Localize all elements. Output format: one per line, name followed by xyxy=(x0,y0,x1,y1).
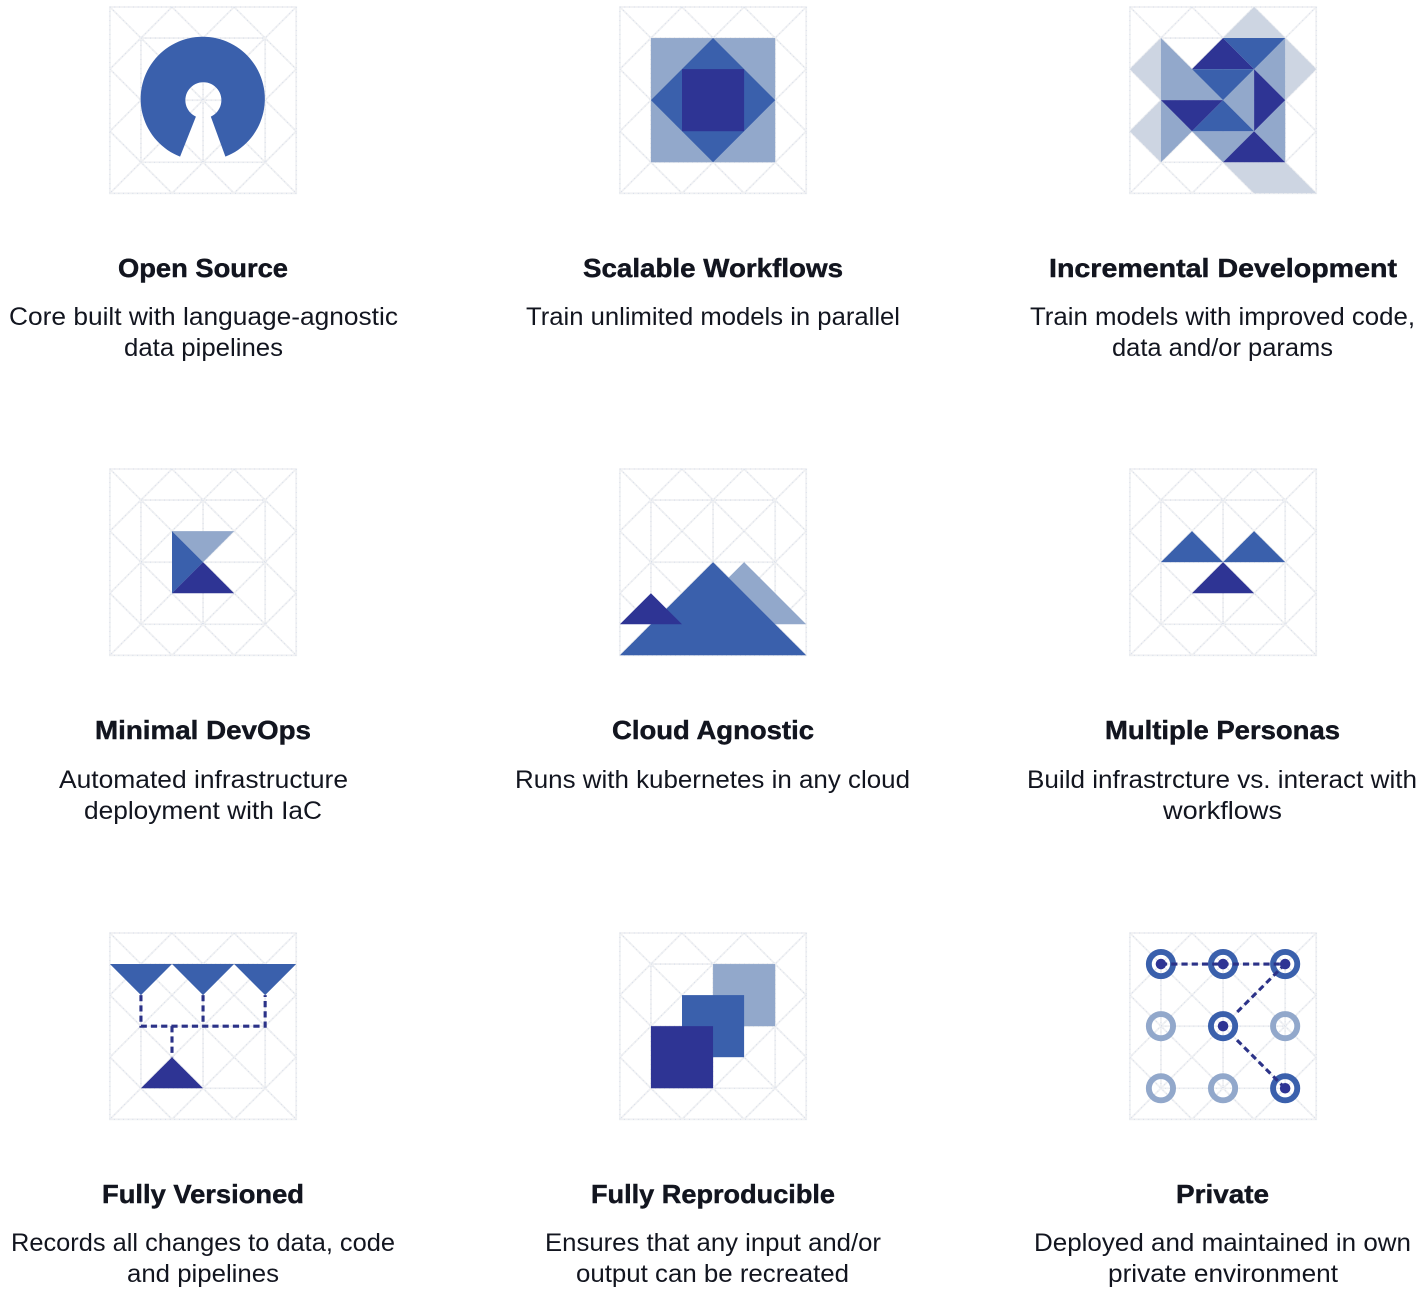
text: Fully Versioned description: Records all changes to data, code xyxy=(11,1229,395,1257)
text: Incremental Development description xyxy=(1030,303,1415,362)
text: Private description: Deployed and maintained in own xyxy=(1034,1229,1411,1257)
text: Fully Versioned description: and pipelines xyxy=(127,1260,279,1288)
text: Incremental Development description: data and/or params xyxy=(1112,334,1333,362)
icon: open source keyhole xyxy=(110,7,296,193)
panel: Scalable Workflows xyxy=(526,7,900,331)
panel: Fully Versioned xyxy=(11,933,395,1288)
heading: Fully Reproducible: Fully Reproducible xyxy=(591,1179,835,1209)
panel: Fully Reproducible xyxy=(545,933,881,1288)
panel: Private xyxy=(1034,933,1411,1288)
heading: Scalable Workflows: Scalable Workflows xyxy=(583,253,843,283)
text: Cloud Agnostic description: Runs with kubernetes in any cloud xyxy=(515,766,910,794)
text: Open Source description: Core built with language-agnostic xyxy=(9,303,398,331)
icon: three triangles forming K xyxy=(110,469,296,655)
text: Fully Reproducible description: Ensures that any input and/or xyxy=(545,1229,881,1257)
panel: Minimal DevOps xyxy=(59,469,348,825)
text: Private description xyxy=(1034,1229,1411,1288)
heading: Multiple Personas: Multiple Personas xyxy=(1105,715,1340,745)
icon: merging triangles with dashed connectors xyxy=(110,933,296,1119)
heading: Open Source: Open Source xyxy=(118,253,288,283)
heading: Fully Versioned: Fully Versioned xyxy=(102,1179,304,1209)
text: Minimal DevOps description xyxy=(59,766,348,825)
text: Minimal DevOps description: deployment with IaC xyxy=(84,797,322,825)
panel: Cloud Agnostic xyxy=(515,469,910,794)
icon: stacked squares xyxy=(620,933,806,1119)
text: Fully Versioned description xyxy=(11,1229,395,1288)
text: Multiple Personas description xyxy=(1027,766,1417,825)
icon: nested squares xyxy=(620,7,806,193)
text: Private description: private environment xyxy=(1108,1260,1338,1288)
heading: Cloud Agnostic: Cloud Agnostic xyxy=(612,715,814,745)
text: Open Source description: data pipelines xyxy=(124,334,283,362)
panel: Incremental Development xyxy=(1030,7,1415,362)
text: Fully Reproducible description: output can be recreated xyxy=(576,1260,849,1288)
text: Open Source description xyxy=(9,303,398,362)
text: Multiple Personas description: Build infrastrcture vs. interact with xyxy=(1027,766,1417,794)
heading: Private: Private xyxy=(1176,1179,1269,1209)
text: Fully Reproducible description xyxy=(545,1229,881,1288)
panel: Multiple Personas xyxy=(1027,469,1417,825)
heading: Incremental Development: Incremental Development xyxy=(1049,253,1397,283)
icon: network of target nodes xyxy=(1130,933,1316,1119)
icon: three triangles xyxy=(1130,469,1316,655)
text: Scalable Workflows description: Train unlimited models in parallel xyxy=(526,303,900,331)
icon: mountain triangles xyxy=(620,469,806,655)
text: Multiple Personas description: workflows xyxy=(1162,797,1282,825)
heading: Minimal DevOps: Minimal DevOps xyxy=(95,715,311,745)
text: Minimal DevOps description: Automated infrastructure xyxy=(59,766,348,794)
panel: Open Source xyxy=(9,7,398,362)
text: Incremental Development description: Train models with improved code, xyxy=(1030,303,1415,331)
icon: triangle mosaic xyxy=(1130,7,1316,193)
